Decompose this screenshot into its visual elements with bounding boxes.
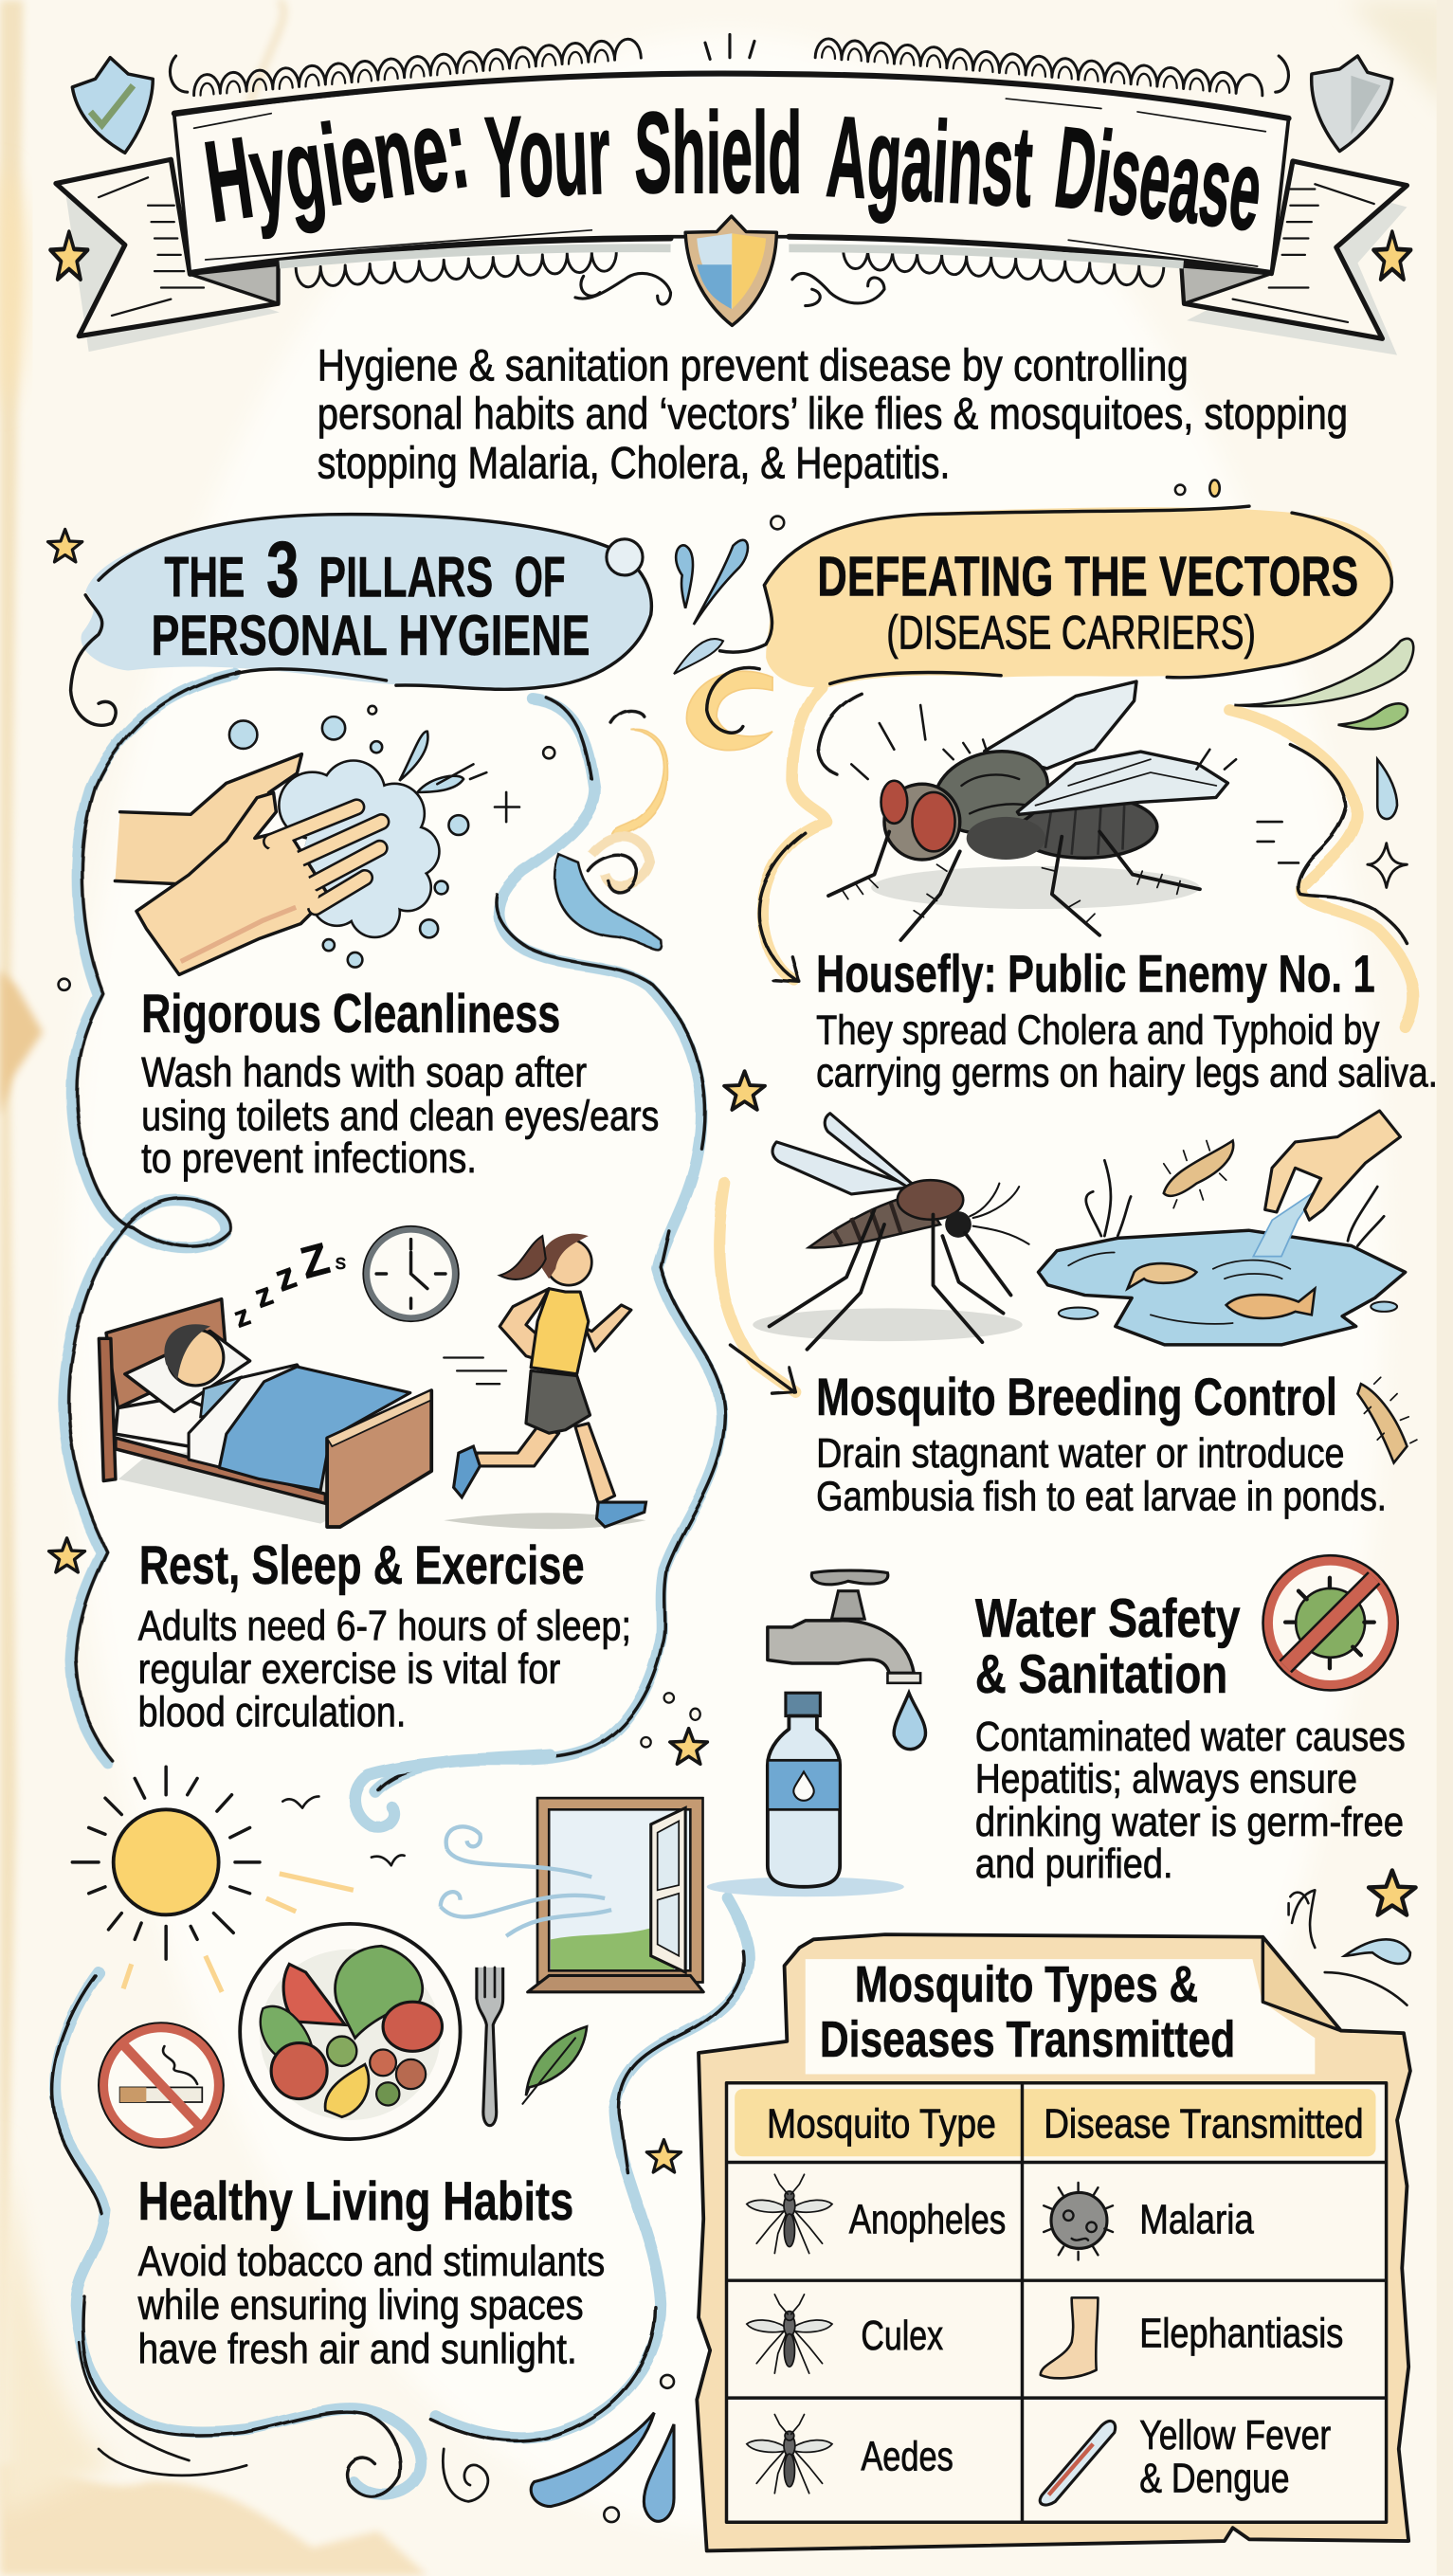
droplets: centre top (674, 540, 748, 674)
row: culex: Culex (861, 2313, 943, 2359)
heading: 3 pillars blob: THE (164, 545, 245, 609)
body text: Adults need 6-7 hours of sleep; (138, 1604, 631, 1650)
body text: using toilets and clean eyes/ears (141, 1093, 659, 1139)
panel: personal hygiene flowing border (64, 672, 725, 1791)
icon: sun (72, 1767, 405, 1992)
table header (767, 2102, 1364, 2148)
body text: regular exercise is vital for (138, 1646, 560, 1693)
ornaments: leaves and droplets right (1234, 639, 1413, 887)
intro text: Hygiene & sanitation prevent disease by controlling (318, 340, 1189, 390)
stars: banner (50, 232, 1411, 280)
icon: soap foam (278, 759, 441, 938)
folded corner (1262, 1937, 1341, 2031)
icon: no smoking (99, 2023, 224, 2148)
title text: Against (824, 92, 1036, 231)
icon: open window (441, 1798, 703, 1992)
icon: food plate (240, 1924, 461, 2139)
body text: Avoid tobacco and stimulants (138, 2239, 605, 2285)
panel: rest sleep exercise (99, 1226, 646, 1736)
icon: fork (477, 1968, 503, 2126)
body text (816, 1008, 1438, 1097)
row: aedes: Aedes (861, 2434, 954, 2479)
ribbon tail: right (1182, 161, 1407, 355)
banner heavy edges (174, 74, 1289, 273)
ornaments: water splashes top right of table (1289, 1890, 1410, 2005)
row: aedes: Yellow Fever (1139, 2413, 1331, 2458)
panel: mosquito breeding control (753, 1111, 1417, 1519)
water swirl: right of hands (555, 711, 667, 950)
panel: healthy living habits (72, 1767, 703, 2373)
ribbon tail: left (56, 159, 280, 352)
body text: to prevent infections. (141, 1135, 477, 1182)
panel: water safety (707, 1555, 1406, 1896)
icon: runner (444, 1234, 646, 1529)
ornaments: bottom droplets and swirl (79, 2342, 674, 2522)
title text: Shield (634, 88, 802, 217)
star: right centre (724, 1071, 765, 1110)
body text (138, 1604, 631, 1736)
body text: Drain stagnant water or introduce (816, 1431, 1345, 1477)
icon: no germs (1263, 1555, 1398, 1690)
row: culex: Elephantiasis (1139, 2312, 1343, 2357)
heading: 3 pillars blob: OF (515, 545, 566, 609)
panel: mosquito types table (697, 1934, 1410, 2550)
star: above table (1369, 1871, 1416, 1915)
body text: and purified. (975, 1841, 1172, 1887)
body text (975, 1714, 1406, 1887)
panel: vectors flowing border (719, 687, 1413, 1394)
icon: zzz: Z (296, 1233, 335, 1288)
icon: mosquito (753, 1114, 1029, 1350)
icon: hands (115, 754, 381, 974)
star: top left (48, 529, 82, 562)
ornament flourishes (575, 273, 884, 306)
banner face (174, 74, 1289, 274)
icon: tap (768, 1570, 926, 1750)
ornament: yellow swirl centre (686, 667, 772, 751)
icon: larva right (1357, 1377, 1417, 1462)
star and dots: right middle (641, 1693, 707, 1764)
heading: Healthy Living Habits (138, 2171, 573, 2232)
icon: center shield (685, 216, 776, 325)
icon: water bottle (707, 1693, 904, 1896)
body text: drinking water is germ-free (975, 1800, 1404, 1845)
row: anopheles (747, 2174, 1255, 2259)
intro text: stopping Malaria, Cholera, & Hepatitis. (318, 439, 950, 488)
heading: Water Safety (975, 1588, 1241, 1649)
icon: pond with fish (1038, 1160, 1406, 1345)
row: aedes: & Dengue (1139, 2457, 1290, 2502)
body text: blood circulation. (138, 1690, 406, 1736)
title text: Your (482, 89, 612, 222)
table title (820, 1956, 1235, 2068)
panel: healthy living flowing border (52, 1755, 749, 2497)
body text: have fresh air and sunlight. (138, 2327, 577, 2373)
body text (137, 2239, 605, 2373)
icon: right shield (1312, 56, 1392, 152)
heading: & Sanitation (975, 1644, 1227, 1705)
body text (816, 1431, 1387, 1519)
paper inner area (806, 1959, 1315, 2075)
icon: zzz: z (229, 1298, 255, 1334)
row: aedes (747, 2413, 1331, 2505)
icon: housefly illustration (828, 681, 1299, 940)
paper sheet (697, 1934, 1410, 2550)
heading: Rest, Sleep & Exercise (139, 1535, 585, 1596)
panel: rigorous cleanliness (59, 706, 659, 1182)
body text (141, 1049, 659, 1182)
panel: defeating the vectors heading: (DISEASE CARRIERS) (886, 605, 1256, 659)
star: lower centre (646, 2140, 681, 2172)
heading: Rigorous Cleanliness (141, 984, 560, 1044)
banner highlights (194, 99, 1265, 266)
panel: housefly (816, 681, 1438, 1097)
table title: Mosquito Types & (855, 1956, 1198, 2013)
icon: bed (99, 1299, 431, 1527)
panel: defeating the vectors heading (720, 506, 1393, 687)
icon: zzz: s (336, 1250, 346, 1274)
icon: bubbles (59, 706, 554, 990)
row: anopheles: Anopheles (849, 2198, 1006, 2243)
icon: leaf (522, 2026, 587, 2104)
body text: Hepatitis; always ensure (975, 1757, 1357, 1803)
table title: Diseases Transmitted (820, 2011, 1235, 2068)
star: left middle (49, 1538, 85, 1572)
dots: top centre (1175, 480, 1220, 497)
heading: 3 pillars blob: PILLARS (318, 545, 493, 609)
icon: larva (1164, 1141, 1233, 1208)
icon: zzz: z (270, 1254, 301, 1300)
intro text (318, 340, 1348, 488)
title text: Hygiene: (197, 82, 476, 246)
body text: while ensuring living spaces (137, 2282, 584, 2329)
icon: clock (363, 1226, 459, 1321)
table header: Disease Transmitted (1044, 2102, 1364, 2148)
heading: 3 pillars blob (71, 515, 651, 725)
body text: Wash hands with soap after (141, 1049, 587, 1096)
title text (197, 82, 1268, 255)
icon: hand pouring (1253, 1111, 1401, 1257)
table (726, 2083, 1387, 2522)
icon: left shield with check (72, 58, 153, 153)
icon: zzz: z (250, 1276, 278, 1315)
scallop border (170, 34, 1288, 287)
title banner ribbon (56, 34, 1407, 355)
row: anopheles: Malaria (1139, 2198, 1255, 2243)
row: culex (747, 2295, 1343, 2378)
dot: above vectors (771, 517, 784, 529)
heading (975, 1588, 1241, 1705)
heading: 3 pillars blob: 3 (266, 526, 300, 614)
table header: Mosquito Type (767, 2102, 996, 2148)
heading: 3 pillars blob: PERSONAL HYGIENE (152, 603, 590, 667)
icon: zzz (229, 1233, 346, 1334)
sparkle (437, 764, 519, 822)
